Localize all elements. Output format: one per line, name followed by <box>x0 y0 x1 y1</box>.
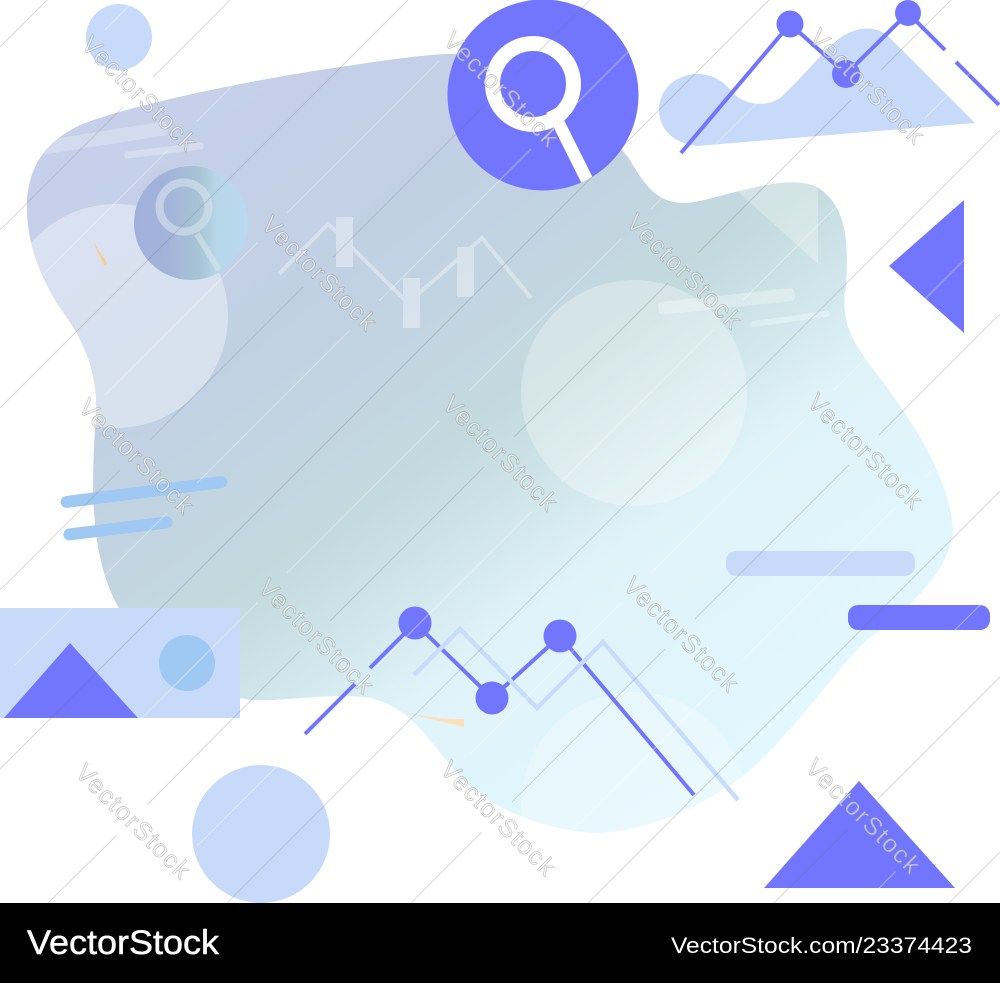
top right mountain with line chart <box>659 0 999 153</box>
watermarks: VectorStock <box>73 393 199 520</box>
accent mark: lower centre <box>402 711 464 727</box>
ghost circle: bottom <box>521 692 747 918</box>
watermarks: VectorStock <box>804 23 930 150</box>
footer image id: VectorStock.com/23374423 <box>671 933 972 958</box>
watermarks: VectorStock <box>253 573 379 700</box>
top circle <box>86 4 152 70</box>
left blue bars <box>60 475 228 541</box>
ghost line chart <box>279 217 531 328</box>
ghost circle: upper left <box>32 204 228 428</box>
bottom right triangle <box>764 781 955 888</box>
watermarks: VectorStock <box>435 755 561 882</box>
watermarks: VectorStock <box>256 210 382 337</box>
watermarks: VectorStock <box>76 30 202 157</box>
background blob <box>27 54 953 833</box>
right pale bar <box>726 551 915 576</box>
watermarks: VectorStock <box>618 571 744 698</box>
watermarks: VectorStock <box>802 388 928 515</box>
ghost triangle <box>738 182 818 264</box>
main line chart <box>305 606 738 800</box>
watermarks: VectorStock <box>438 26 564 153</box>
accent mark: upper left <box>94 240 107 266</box>
ghost magnifier <box>134 166 248 280</box>
footer bar <box>0 903 1000 983</box>
right triangle <box>889 200 964 333</box>
ghost bars: right <box>658 288 830 328</box>
watermarks: VectorStock <box>621 208 747 335</box>
footer brand: VectorStock <box>27 924 220 962</box>
ghost shapes clipped to blob <box>32 80 1000 506</box>
image card <box>0 608 240 718</box>
watermarks: VectorStock <box>70 758 196 885</box>
right purple bar <box>848 605 990 630</box>
watermarks <box>70 23 930 885</box>
ghost circle: centre <box>521 280 747 506</box>
watermarks: VectorStock <box>800 753 926 880</box>
ghost bar: upper left thin <box>124 142 204 159</box>
watermarks: VectorStock <box>437 390 563 517</box>
bottom circle <box>192 765 330 903</box>
magnifier badge <box>448 0 638 190</box>
ghost bar: upper left wide <box>40 121 168 155</box>
